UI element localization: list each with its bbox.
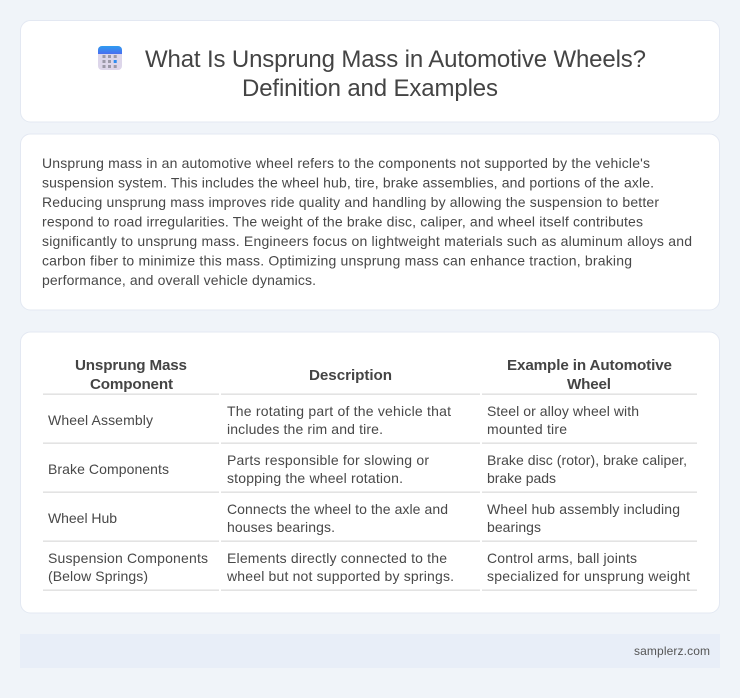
footer: samplerz.com xyxy=(634,644,710,658)
table row: brake components: stopping the wheel rotation. xyxy=(227,470,403,486)
table header: Wheel xyxy=(567,376,611,393)
title: What Is Unsprung Mass in Automotive Wheels? xyxy=(145,46,646,73)
panel: component table xyxy=(20,332,720,613)
table row: wheel hub xyxy=(48,501,680,535)
table row: suspension components: Elements directly connected to the xyxy=(227,550,447,566)
table row: wheel assembly: Steel or alloy wheel with xyxy=(487,403,639,419)
table row: wheel hub: Wheel Hub xyxy=(48,510,117,526)
text block: definition: significantly to unsprung mass. Engineers focus on lightweight materials such as aluminum alloys and xyxy=(42,233,692,249)
table row: suspension components xyxy=(48,550,690,584)
table row: wheel hub: Connects the wheel to the axle and xyxy=(227,501,448,517)
table row: wheel assembly: Wheel Assembly xyxy=(48,412,153,428)
title xyxy=(145,46,646,102)
text block: definition: Reducing unsprung mass improves ride quality and handling by allowing the suspension to better xyxy=(42,194,659,210)
text block: definition: Unsprung mass in an automotive wheel refers to the components not supported by the vehicle's xyxy=(42,155,650,171)
table row: brake components: brake pads xyxy=(487,470,556,486)
table header: Description xyxy=(309,367,392,384)
table row: suspension components: specialized for unsprung weight xyxy=(487,568,690,584)
panel: definition paragraph xyxy=(20,134,720,310)
table row: brake components: Parts responsible for slowing or xyxy=(227,452,429,468)
table header: Example in Automotive xyxy=(507,357,672,374)
text block: definition xyxy=(42,155,692,288)
icon: calendar xyxy=(98,46,122,70)
table row: brake components xyxy=(48,452,687,486)
table row: wheel hub: bearings xyxy=(487,519,541,535)
text block: definition: performance, and overall vehicle dynamics. xyxy=(42,272,316,288)
table header: Unsprung Mass xyxy=(75,357,187,374)
table row: wheel assembly xyxy=(48,403,639,437)
text block: definition: carbon fiber to minimize this mass. Optimizing unsprung mass can enhance traction, braking xyxy=(42,252,632,268)
table row: wheel hub: Wheel hub assembly including xyxy=(487,501,680,517)
table row: suspension components: (Below Springs) xyxy=(48,568,148,584)
table row: brake components: Brake disc (rotor), brake caliper, xyxy=(487,452,687,468)
panel: title card xyxy=(20,20,720,122)
table row: wheel assembly: includes the rim and tire. xyxy=(227,421,383,437)
text block: definition: respond to road irregularities. The weight of the brake disc, caliper, and wheel itself contributes xyxy=(42,214,643,230)
table row: wheel assembly: The rotating part of the vehicle that xyxy=(227,403,451,419)
table header xyxy=(75,357,672,393)
text block: definition: suspension system. This includes the wheel hub, tire, brake assemblies, and portions of the axle. xyxy=(42,174,654,190)
table row: brake components: Brake Components xyxy=(48,461,169,477)
table row: wheel assembly: mounted tire xyxy=(487,421,567,437)
table row: suspension components: wheel but not supported by springs. xyxy=(226,568,454,584)
table row: suspension components: Control arms, ball joints xyxy=(487,550,637,566)
table row: wheel hub: houses bearings. xyxy=(227,519,335,535)
title: Definition and Examples xyxy=(242,75,498,102)
footer xyxy=(20,634,720,668)
table row: suspension components: Suspension Components xyxy=(48,550,208,566)
table header: Component xyxy=(90,376,173,393)
